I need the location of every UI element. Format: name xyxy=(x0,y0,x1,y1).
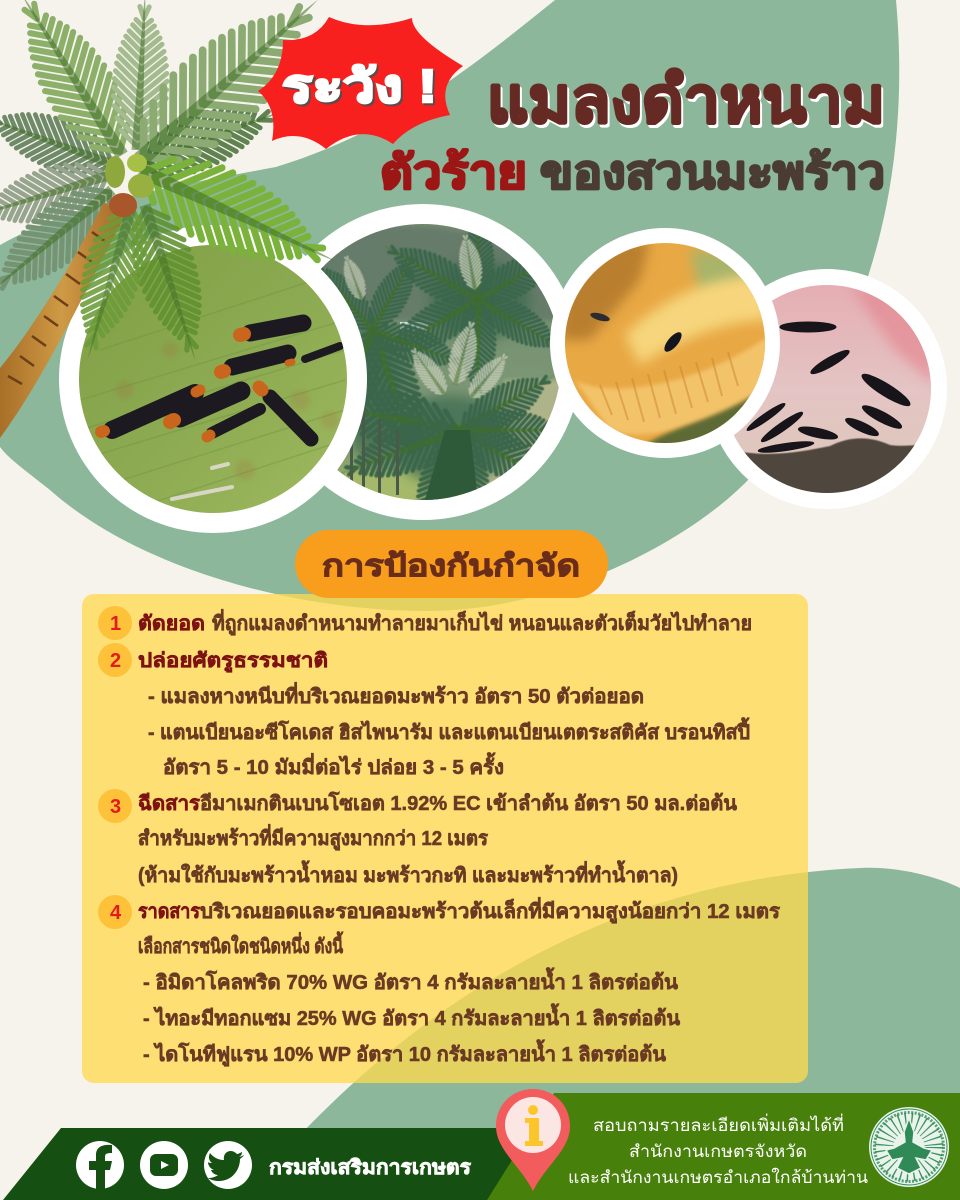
green blob: top xyxy=(0,0,899,611)
heading pill: การป้องกันกำจัด xyxy=(322,550,580,583)
item 4: 4 xyxy=(110,902,122,924)
item 2: 2 xyxy=(110,650,121,672)
item 1: 1 xyxy=(110,613,121,635)
department name: กรมส่งเสริมการเกษตร xyxy=(269,1157,471,1179)
item 2: - แตนเบียนอะซีโคเดส ฮิสไพนารัม และแตนเบียนเตตระสติคัส บรอนทิสปี้ xyxy=(148,717,750,744)
badge text: ระวัง ! xyxy=(282,60,437,112)
yellow content card xyxy=(82,594,808,1083)
palm tree xyxy=(0,0,351,438)
item 2: - แมลงหางหนีบที่บริเวณยอดมะพร้าว อัตรา 50 ตัวต่อยอด xyxy=(148,681,644,708)
item 4: ราดสาร xyxy=(138,901,200,923)
item 1: ตัดยอด xyxy=(138,613,205,635)
item 4: เลือกสารชนิดใดชนิดหนึ่ง ดังนี้ xyxy=(138,931,344,958)
coconuts xyxy=(105,154,154,217)
item 3: (ห้ามใช้กับมะพร้าวน้ำหอม มะพร้าวกะทิ และมะพร้าวที่ทำน้ำตาล) xyxy=(138,860,678,887)
title line 2: red: ตัวร้าย xyxy=(380,146,527,198)
fronds behind trunk xyxy=(0,93,123,188)
green blob: bottom right xyxy=(300,868,960,1200)
fronds xyxy=(126,87,291,190)
title line 2: dark: ของสวนมะพร้าว xyxy=(540,146,885,198)
photo: coconut plantation xyxy=(306,204,573,520)
contact text: สอบถามรายละเอียดเพิ่มเติมได้ที่ xyxy=(593,1113,844,1135)
footer band: dark green xyxy=(3,1128,534,1200)
item 4: - ไทอะมีทอกแซม 25% WG อัตรา 4 กรัมละลายน้ำ 1 ลิตรต่อต้น xyxy=(143,1003,680,1030)
item 3: 3 xyxy=(110,796,121,818)
photo: earwigs on soil xyxy=(707,269,947,509)
icon: info location pin xyxy=(496,1089,570,1191)
trunk xyxy=(0,202,124,438)
item 2 xyxy=(98,643,750,779)
footer band: light green xyxy=(487,1093,960,1200)
item 1 xyxy=(98,606,752,640)
icon: youtube xyxy=(140,1141,188,1189)
icon: department emblem xyxy=(869,1107,949,1187)
item 2: อัตรา 5 - 10 มัมมี่ต่อไร่ ปล่อย 3 - 5 ครั้ง xyxy=(163,752,504,779)
item 4: บริเวณยอดและรอบคอมะพร้าวต้นเล็กที่มีความสูงน้อยกว่า 12 เมตร xyxy=(200,896,780,925)
item 4 xyxy=(98,895,780,1068)
item 4: - อิมิดาโคลพริด 70% WG อัตรา 4 กรัมละลายน้ำ 1 ลิตรต่อต้น xyxy=(143,967,678,994)
item 3: ฉีดสาร xyxy=(138,792,200,815)
item 3 xyxy=(98,789,737,887)
contact text xyxy=(568,1113,868,1187)
photo: black beetles on leaf xyxy=(59,225,367,533)
red starburst badge xyxy=(258,17,463,149)
item 3: สำหรับมะพร้าวที่มีความสูงมากกว่า 12 เมตร xyxy=(138,823,488,852)
photo: larva with parasitoid wasp xyxy=(550,228,780,458)
heading pill xyxy=(295,530,608,598)
icon: twitter xyxy=(204,1141,252,1189)
icon: facebook xyxy=(76,1141,124,1189)
item 4: - ไดโนทีฟูแรน 10% WP อัตรา 10 กรัมละลายน้ำ 1 ลิตรต่อต้น xyxy=(143,1039,666,1068)
contact text: สำนักงานเกษตรจังหวัด xyxy=(629,1142,807,1161)
title line 1: แมลงดำหนาม xyxy=(487,64,885,136)
contact text: และสำนักงานเกษตรอำเภอใกล้บ้านท่าน xyxy=(568,1167,868,1187)
item 2: ปล่อยศัตรูธรรมชาติ xyxy=(138,650,328,674)
item 3: อีมาเมกตินเบนโซเอต 1.92% EC เข้าลำต้น อัตรา 50 มล.ต่อต้น xyxy=(200,791,737,815)
item 1: ที่ถูกแมลงดำหนามทำลายมาเก็บไข่ หนอนและตัวเต็มวัยไปทำลาย xyxy=(212,608,752,637)
